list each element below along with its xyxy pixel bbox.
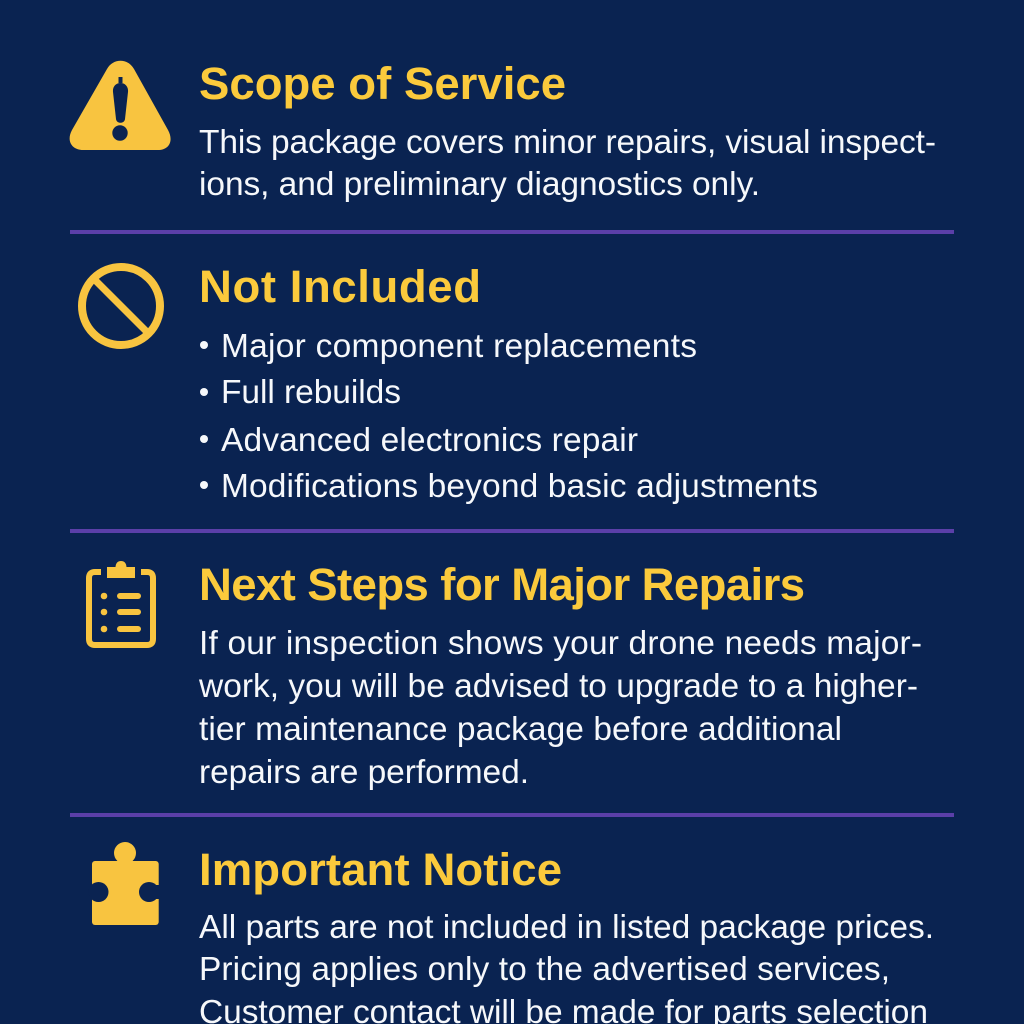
text: scope description: This package covers minor repairs, visual inspect- bbox=[199, 124, 936, 161]
text: next steps description: tier maintenance package before additional bbox=[199, 711, 842, 748]
text: next steps description: repairs are performed. bbox=[199, 754, 529, 791]
list: exclusions: Modifications beyond basic adjustments bbox=[221, 468, 818, 505]
icon: warning triangle bbox=[70, 61, 171, 150]
panel: scope of service bbox=[70, 58, 936, 203]
list: exclusions: Advanced electronics repair bbox=[221, 422, 638, 459]
heading: important notice: Important Notice bbox=[199, 844, 562, 895]
heading: not included: Not Included bbox=[199, 261, 481, 312]
list: exclusions bbox=[200, 328, 818, 505]
heading: scope of service: Scope of Service bbox=[199, 58, 566, 109]
icon: clipboard checklist bbox=[89, 561, 153, 645]
panel: not included bbox=[82, 261, 818, 505]
text: notice description: All parts are not included in listed package prices. bbox=[199, 909, 934, 946]
icon: prohibited sign bbox=[82, 267, 160, 345]
text: notice description: Pricing applies only to the advertised services, bbox=[199, 951, 890, 988]
list: exclusions: Full rebuilds bbox=[221, 374, 401, 411]
list: exclusions: Major component replacements bbox=[221, 328, 697, 365]
panel: important notice bbox=[88, 842, 934, 1024]
panel: next steps for major repairs bbox=[89, 559, 922, 791]
text: next steps description bbox=[198, 625, 922, 791]
text: notice description bbox=[199, 909, 934, 1024]
text: next steps description: work, you will be advised to upgrade to a higher- bbox=[198, 668, 918, 705]
text: scope description bbox=[199, 124, 936, 203]
icon: puzzle piece bbox=[88, 842, 160, 925]
text: next steps description: If our inspection shows your drone needs major- bbox=[199, 625, 922, 662]
heading: next steps for major repairs: Next Steps for Major Repairs bbox=[199, 559, 805, 610]
text: scope description: ions, and preliminary diagnostics only. bbox=[199, 166, 760, 203]
